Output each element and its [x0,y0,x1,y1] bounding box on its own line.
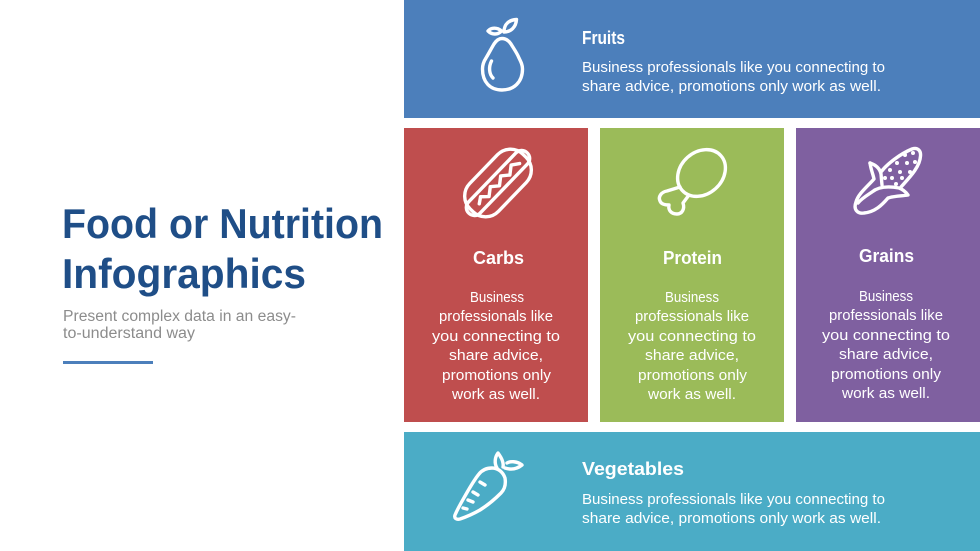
text: carbs: you connecting to [432,328,560,345]
text: vegetables: share advice, promotions only work as well. [582,510,881,527]
icon: corn [855,148,921,213]
panel: vegetables [404,432,980,551]
text: carbs: Carbs [473,248,524,268]
text: fruits: Business professionals like you connecting to [582,59,885,76]
text: carbs: share advice, [449,347,543,364]
panel: protein [600,128,784,422]
panel: fruits [404,0,980,118]
text: grains: Grains [859,246,914,266]
subtitle [63,308,296,342]
icon: hot dog [454,139,542,227]
title [62,200,383,297]
text: grains: professionals like [829,307,943,324]
text: grains: share advice, [839,346,933,363]
title: Food or Nutrition [62,200,383,247]
text: grains: work as well. [841,385,930,402]
icon: pear [482,20,522,90]
text: protein: Protein [663,248,722,268]
text: carbs: Business [470,289,524,306]
text: vegetables [582,459,885,527]
icon: carrot [455,453,522,519]
subtitle: to-understand way [63,325,195,342]
panel: grains [796,128,980,422]
text: protein: Business [665,289,719,306]
text: protein: work as well. [647,386,736,403]
text: fruits: share advice, promotions only work as well. [582,78,881,95]
accent line [63,361,153,364]
icon: chicken leg [659,140,735,214]
text: vegetables: Business professionals like you connecting to [582,491,885,508]
text: carbs: professionals like [439,308,553,325]
text: vegetables: Vegetables [582,459,684,479]
text: grains: Business [859,288,913,305]
text: carbs [432,248,560,403]
text: grains: promotions only [831,366,942,383]
text: grains [822,246,950,402]
text: protein: share advice, [645,347,739,364]
text: fruits: Fruits [582,28,625,48]
panel: carbs [404,128,588,422]
text: protein: you connecting to [628,328,756,345]
text: protein [628,248,756,403]
text: carbs: promotions only [442,367,552,384]
text: protein: promotions only [638,367,748,384]
text: fruits [582,28,885,95]
text: grains: you connecting to [822,327,950,344]
text: carbs: work as well. [451,386,540,403]
text: protein: professionals like [635,308,749,325]
title: Infographics [62,250,306,297]
subtitle: Present complex data in an easy- [63,308,296,325]
